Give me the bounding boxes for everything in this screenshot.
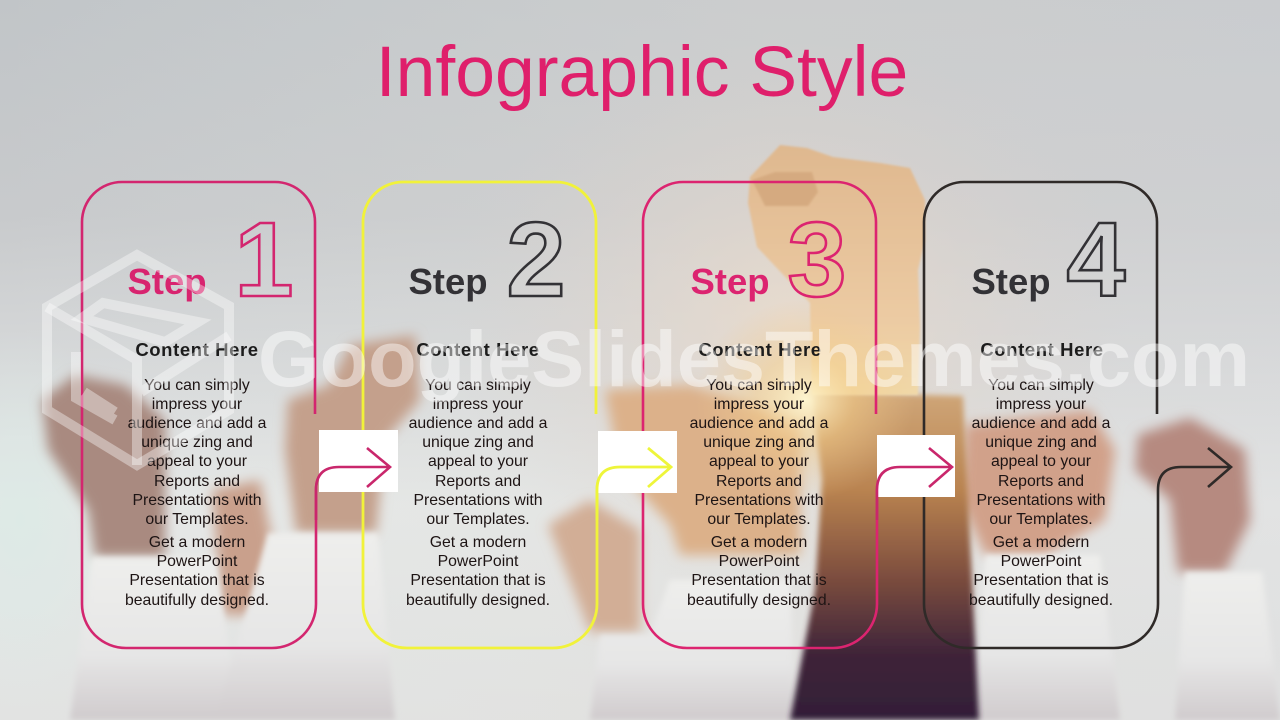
- watermark logo: cube: [47, 255, 229, 465]
- step 3 body text: appeal to your: [709, 453, 809, 470]
- step 2 body text: Reports and: [435, 473, 521, 490]
- step 2 body text: Presentations with: [413, 492, 543, 509]
- step 4 body text: appeal to your: [991, 453, 1091, 470]
- step 4 subheading: Content Here: [980, 339, 1104, 360]
- step 4 body text: unique zing and: [985, 434, 1097, 451]
- step 4 body text: PowerPoint: [1001, 553, 1082, 570]
- step 4 body text: our Templates.: [989, 511, 1093, 528]
- step 1 body text: PowerPoint: [157, 553, 238, 570]
- step 1 body text: Presentations with: [132, 492, 262, 509]
- step 2 body text: unique zing and: [422, 434, 534, 451]
- step 3 body text: unique zing and: [703, 434, 815, 451]
- step 2 body text: audience and add a: [409, 415, 548, 432]
- panel: step 1: [82, 182, 390, 648]
- step 3 outline: [643, 182, 951, 648]
- step 2 body text: beautifully designed.: [406, 592, 550, 609]
- step 1 body text: You can simply: [144, 377, 250, 394]
- step 3 body text: impress your: [714, 396, 804, 413]
- arrow 3: white tab with pink arrow: [877, 435, 955, 520]
- step 1 body text: beautifully designed.: [125, 592, 269, 609]
- step 2 body text: PowerPoint: [438, 553, 519, 570]
- step 1 body text: unique zing and: [141, 434, 253, 451]
- panel: step 3: [643, 182, 951, 648]
- step 3 body text: Presentation that is: [691, 572, 827, 589]
- step 3 body text: our Templates.: [707, 511, 811, 528]
- step 2 body text: appeal to your: [428, 453, 528, 470]
- step 3 body text: Presentations with: [694, 492, 824, 509]
- step 2 body text: Get a modern: [430, 534, 526, 551]
- step 2 body text: our Templates.: [426, 511, 530, 528]
- step 2 body text: Presentation that is: [410, 572, 546, 589]
- step 4 numeral: 4: [1067, 201, 1126, 319]
- step 4 body text: Reports and: [998, 473, 1084, 490]
- arrow 2: white tab with yellow arrow: [597, 431, 677, 520]
- step 3 subheading: Content Here: [698, 339, 822, 360]
- step 4 body text: Get a modern: [993, 534, 1089, 551]
- step 2 body text: impress your: [433, 396, 523, 413]
- step 2 body text: You can simply: [425, 377, 531, 394]
- central forearm: [790, 392, 979, 720]
- step 3 body text: audience and add a: [690, 415, 829, 432]
- step 2 subheading: Content Here: [416, 339, 540, 360]
- title: Infographic Style: [376, 32, 908, 112]
- step 2 numeral: 2: [507, 201, 565, 319]
- step 1 body text: Reports and: [154, 473, 240, 490]
- step 3 body text: You can simply: [706, 377, 812, 394]
- step 1 subheading: Content Here: [135, 339, 259, 360]
- step 1 body text: our Templates.: [145, 511, 249, 528]
- step 4 body text: Presentation that is: [973, 572, 1109, 589]
- arrow 4: dark arrow: [1208, 448, 1231, 487]
- step 4 outline: [924, 182, 1231, 648]
- step 1 body text: Presentation that is: [129, 572, 265, 589]
- panel: step 4: [924, 182, 1231, 648]
- step 1 numeral: 1: [235, 201, 293, 319]
- central fist: [748, 145, 925, 395]
- step 3 heading: Step: [690, 261, 770, 302]
- step 3 body text: beautifully designed.: [687, 592, 831, 609]
- step 4 heading: Step: [971, 261, 1051, 302]
- step 4 body text: You can simply: [988, 377, 1094, 394]
- step 3 numeral: 3: [788, 201, 846, 319]
- step 1 body text: Get a modern: [149, 534, 245, 551]
- step 4 body text: Presentations with: [976, 492, 1106, 509]
- step 3 body text: PowerPoint: [719, 553, 800, 570]
- step 1 outline: [82, 182, 390, 648]
- step 4 body text: impress your: [996, 396, 1086, 413]
- step 1 body text: impress your: [152, 396, 242, 413]
- blurred fists: [42, 335, 1250, 632]
- step 2 outline: [363, 182, 671, 648]
- step 4 body text: beautifully designed.: [969, 592, 1113, 609]
- watermark text: GoogleSlidesThemes.com: [258, 314, 1250, 403]
- step 3 body text: Get a modern: [711, 534, 807, 551]
- step 2 heading: Step: [408, 261, 488, 302]
- step 1 body text: audience and add a: [128, 415, 267, 432]
- step 4 body text: audience and add a: [972, 415, 1111, 432]
- blurred sleeves: [70, 533, 1280, 720]
- step 1 heading: Step: [127, 261, 207, 302]
- step 3 body text: Reports and: [716, 473, 802, 490]
- step 1 body text: appeal to your: [147, 453, 247, 470]
- panel: step 2: [363, 182, 671, 648]
- arrow 1: white tab with pink arrow: [316, 430, 398, 520]
